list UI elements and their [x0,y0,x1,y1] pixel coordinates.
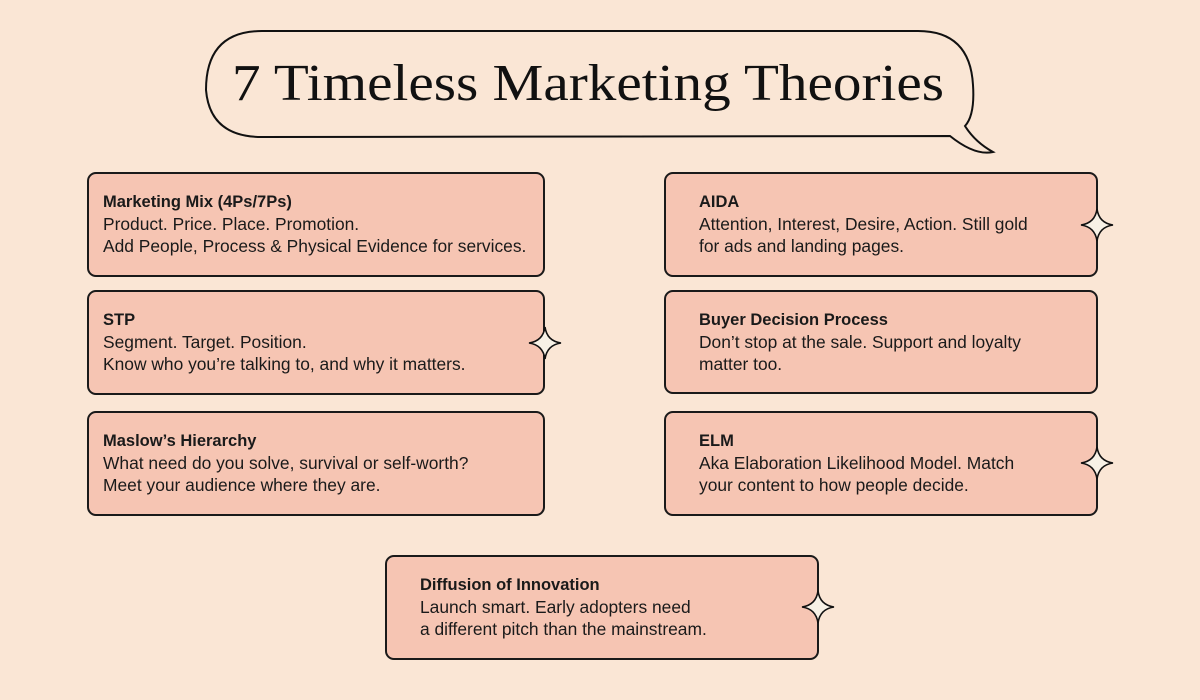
panel: AIDA: AIDA [699,193,739,211]
panel: diffusion [385,555,819,660]
panel: buyer decision: Don’t stop at the sale. Support and loyalty [699,332,1021,352]
panel: AIDA [664,172,1098,277]
panel: STP: Segment. Target. Position. [103,332,307,352]
panel: Maslow: Meet your audience where they are. [103,475,380,495]
panel: buyer decision: matter too. [699,354,782,374]
panel: diffusion: a different pitch than the mainstream. [420,619,707,639]
icon: sparkle AIDA [1080,209,1114,241]
panel: STP [87,290,545,395]
panel: ELM: ELM [699,432,734,450]
panel: STP: STP [103,311,135,329]
panel: ELM: Aka Elaboration Likelihood Model. Match [699,453,1014,473]
icon: sparkle ELM [1080,447,1114,479]
title: 7 Timeless Marketing Theories [232,55,944,112]
panel: diffusion: Diffusion of Innovation [420,576,600,594]
panel: Maslow: What need do you solve, survival or self-worth? [103,453,468,473]
icon: sparkle STP [528,326,562,360]
title bubble [205,30,996,154]
panel: diffusion: Launch smart. Early adopters need [420,597,691,617]
panel: marketing mix: Add People, Process & Physical Evidence for services. [103,236,526,256]
panel: buyer decision [664,290,1098,394]
panel: Maslow: Maslow’s Hierarchy [103,432,256,450]
panel: ELM: your content to how people decide. [699,475,969,495]
panel: ELM [664,411,1098,516]
icon: sparkle diffusion [802,591,834,623]
panel: Maslow [87,411,545,516]
panel: marketing mix [87,172,545,277]
panel: buyer decision: Buyer Decision Process [699,311,888,329]
panel: AIDA: for ads and landing pages. [699,236,904,256]
panel: STP: Know who you’re talking to, and why it matters. [103,354,465,374]
panel: AIDA: Attention, Interest, Desire, Action. Still gold [699,214,1028,234]
panel: marketing mix: Product. Price. Place. Promotion. [103,214,359,234]
panel: marketing mix: Marketing Mix (4Ps/7Ps) [103,193,292,211]
